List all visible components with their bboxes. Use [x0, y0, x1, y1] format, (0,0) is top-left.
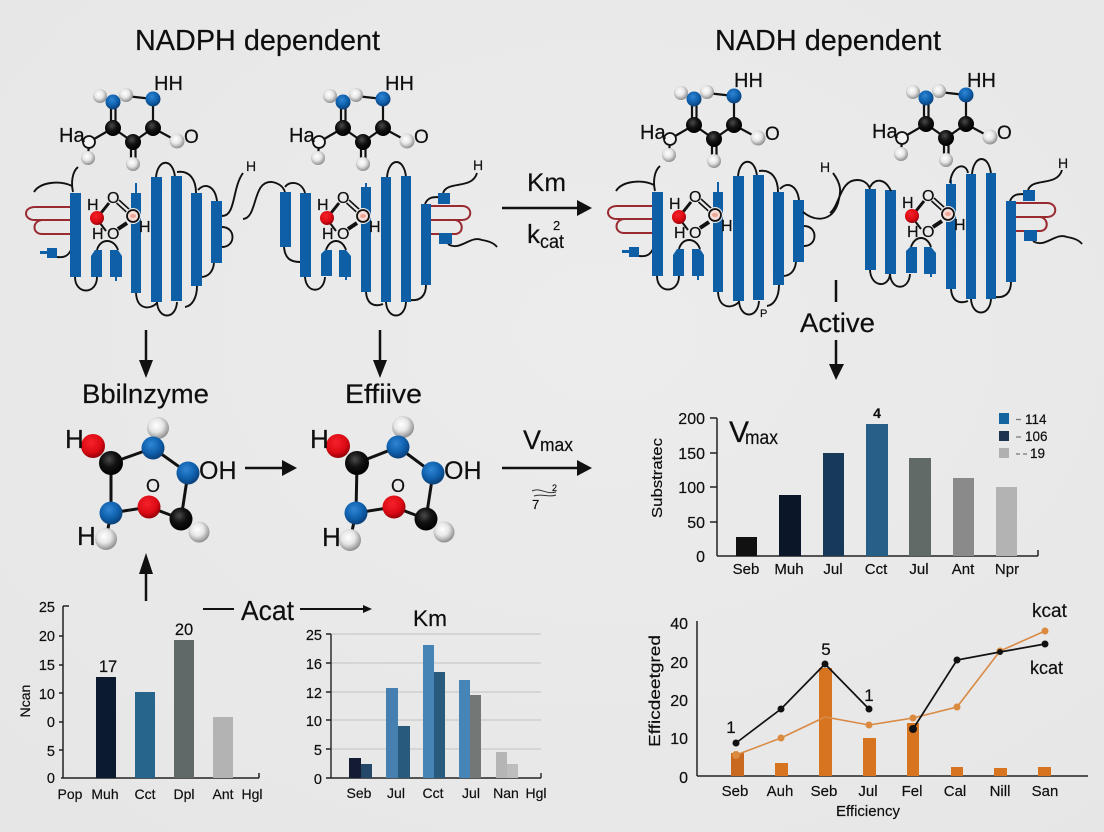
cofactor molecule: Ha — [640, 122, 666, 144]
cofactor molecule — [59, 73, 199, 171]
y tick labels: 10 — [39, 687, 55, 703]
black line — [732, 640, 1048, 746]
active site: H — [902, 195, 914, 212]
y tick labels: 5 — [314, 743, 322, 759]
enzyme structure 1 (NADPH) — [26, 73, 256, 316]
x labels: Muh — [774, 561, 804, 578]
y tick labels — [678, 411, 705, 566]
x labels: Hgl — [241, 786, 263, 802]
y tick labels: 10 — [670, 731, 688, 748]
x labels: Seb — [733, 561, 759, 578]
chart title — [729, 416, 778, 449]
x labels: Jul — [462, 785, 480, 801]
arrow with Vmax label: 2 — [552, 483, 557, 493]
active site: H — [317, 197, 329, 214]
protein ribbon — [830, 159, 1082, 312]
cofactor molecule — [872, 70, 1012, 167]
y tick labels: 0 — [696, 549, 705, 566]
y tick labels: 20 — [670, 693, 688, 710]
arrow with Km and kcat labels: 2 — [553, 218, 560, 233]
cofactor molecule: O — [765, 124, 780, 145]
x labels: Jul — [858, 783, 878, 800]
x labels: Muh — [91, 786, 119, 802]
axes — [697, 621, 1088, 776]
x labels: Seb — [811, 783, 837, 800]
molecule: substrate left: O — [146, 476, 160, 496]
enzyme structure 4 (NADH) — [830, 70, 1082, 312]
y tick labels: 20 — [39, 629, 55, 645]
arrow: down centre — [373, 330, 387, 378]
y tick labels: 10 — [306, 714, 322, 730]
x labels: Nan — [493, 785, 519, 801]
cofactor molecule: HH — [154, 73, 183, 95]
x labels: Jul — [823, 561, 843, 578]
x labels: Ant — [212, 786, 234, 802]
x labels: Auh — [767, 783, 793, 800]
title: NADH dependent: NADH dependent — [715, 25, 941, 57]
cofactor molecule: O — [997, 123, 1012, 144]
active site: O — [107, 190, 119, 207]
active site: H — [907, 224, 919, 241]
x labels: Ant — [952, 561, 975, 578]
active site: H — [721, 218, 733, 235]
bars — [96, 640, 233, 778]
arrow with Vmax label: 7 — [532, 497, 539, 512]
active site: H — [674, 225, 686, 242]
molecule: substrate left: H — [65, 424, 84, 454]
arrow with Km and kcat labels: Km — [527, 169, 566, 197]
molecule: substrate right: H — [322, 522, 341, 552]
active site: H — [669, 196, 681, 213]
orange line — [732, 628, 1048, 759]
active site: H — [954, 217, 966, 234]
legend: 106 — [1025, 429, 1048, 444]
active site: O — [107, 226, 119, 243]
x labels: Npr — [995, 561, 1019, 578]
bars — [349, 645, 518, 778]
y tick labels: 0 — [314, 772, 322, 788]
arrow with Km and kcat labels: k — [527, 219, 541, 249]
y tick labels: 0 — [47, 715, 55, 731]
cofactor molecule: O — [184, 127, 199, 148]
label: Active with arrow — [800, 280, 875, 380]
y tick labels: 40 — [670, 616, 688, 633]
cofactor molecule: Ha — [59, 125, 85, 147]
tail with H — [222, 158, 256, 216]
tail with H: H — [820, 159, 830, 175]
active site: O — [689, 189, 701, 206]
y tick labels: 50 — [687, 515, 705, 532]
x labels: Seb — [347, 785, 372, 801]
y tick labels: 25 — [39, 600, 55, 616]
x labels — [58, 786, 263, 802]
chart title: max — [745, 428, 778, 449]
x labels: Fel — [902, 783, 922, 800]
molecule: substrate left — [65, 417, 236, 551]
value labels: 1 — [864, 686, 874, 705]
grouped bar chart: Km — [306, 606, 547, 801]
x labels: Cct — [422, 785, 444, 801]
x labels — [347, 785, 547, 801]
y tick labels: 20 — [670, 655, 688, 672]
value labels: 5 — [821, 640, 831, 659]
heading: Bbilnzyme: Bbilnzyme — [82, 379, 209, 409]
active site: H — [92, 226, 104, 243]
y axis title: Efficdeetgred — [647, 635, 664, 747]
axes — [59, 606, 259, 778]
legend — [999, 412, 1048, 461]
x labels: Cct — [865, 561, 888, 578]
small P label: P — [760, 308, 767, 320]
active site: O — [337, 190, 349, 207]
arrow: down left — [139, 330, 153, 378]
active site — [902, 188, 966, 241]
cofactor molecule: Ha — [872, 121, 898, 143]
arrow: between molecules — [245, 460, 297, 476]
active site — [669, 189, 733, 242]
series labels: kcat — [1030, 658, 1063, 678]
active site: H — [322, 226, 334, 243]
y tick labels: 12 — [306, 686, 322, 702]
active site: H — [139, 219, 151, 236]
axes — [326, 634, 541, 778]
value labels — [726, 640, 874, 737]
series labels: kcat — [1032, 601, 1068, 622]
x axis title: Efficiency — [836, 803, 900, 820]
y tick labels: 100 — [678, 480, 705, 497]
y axis title: Ncan — [17, 685, 33, 717]
combo chart: efficiency and kcat — [647, 601, 1088, 820]
active site: O — [922, 188, 934, 205]
tail with H — [803, 159, 840, 219]
y tick labels: 200 — [678, 411, 705, 428]
active site: O — [689, 225, 701, 242]
gridlines — [331, 634, 541, 749]
molecule: substrate left: H — [77, 521, 96, 551]
chart title: V — [729, 416, 749, 449]
y tick labels: 0 — [47, 771, 55, 787]
value labels — [99, 621, 193, 676]
protein ribbon — [243, 162, 497, 316]
active site — [87, 190, 151, 243]
cofactor molecule: HH — [734, 70, 763, 92]
title: NADPH dependent: NADPH dependent — [135, 25, 380, 57]
axes — [710, 418, 1038, 556]
molecule: substrate right: OH — [444, 457, 482, 485]
arrow with Vmax label — [502, 425, 592, 512]
value labels: 20 — [175, 621, 193, 639]
arrow with Km and kcat labels — [502, 169, 592, 253]
y tick labels: 0 — [679, 770, 688, 787]
protein ribbon — [608, 162, 814, 314]
y tick labels — [39, 600, 55, 787]
label: Active with arrow: Active — [800, 308, 875, 338]
cofactor molecule — [289, 73, 429, 171]
tail with H: H — [246, 158, 256, 174]
y tick labels: 5 — [47, 744, 55, 760]
cofactor molecule — [640, 70, 780, 168]
y tick labels — [670, 616, 688, 787]
arrow with Vmax label: V — [523, 425, 541, 455]
molecule: substrate right: H — [310, 424, 329, 454]
x labels: Nill — [990, 783, 1010, 800]
arrow with Vmax label: max — [540, 435, 573, 455]
label: Acat with arrows: Acat — [241, 595, 294, 626]
active site — [317, 190, 381, 243]
active site: O — [922, 224, 934, 241]
x labels: Cct — [134, 786, 156, 802]
chart title: Km — [413, 606, 447, 631]
molecule: substrate right — [310, 416, 482, 552]
cofactor molecule: Ha — [289, 125, 315, 147]
y tick labels: 15 — [39, 658, 55, 674]
x labels — [722, 783, 1058, 800]
molecule: substrate left: OH — [199, 457, 236, 485]
legend: 114 — [1025, 412, 1047, 427]
value labels: 17 — [99, 658, 117, 676]
molecule: substrate right: O — [391, 476, 405, 496]
legend: 19 — [1030, 446, 1045, 461]
y tick labels: 25 — [306, 628, 322, 644]
orange bars — [731, 668, 1051, 776]
tail label H: H — [1058, 155, 1068, 171]
active site: H — [369, 219, 381, 236]
y axis title: Substratec — [649, 437, 666, 518]
value label: 4 — [873, 405, 881, 421]
x labels: Hgl — [525, 785, 547, 801]
series labels — [1030, 601, 1068, 678]
y tick labels: 150 — [678, 446, 705, 463]
x labels: Cal — [944, 783, 966, 800]
cofactor molecule: O — [414, 127, 429, 148]
bar chart: bottom left — [17, 600, 263, 802]
x labels — [733, 561, 1019, 578]
active site: H — [87, 197, 99, 214]
x labels: Jul — [387, 785, 405, 801]
x labels: Seb — [722, 783, 748, 800]
x labels: Pop — [58, 786, 83, 802]
enzyme structure 3 (NADH) — [608, 70, 840, 320]
heading: Effiive: Effiive — [345, 379, 422, 409]
cofactor molecule: HH — [967, 70, 996, 92]
y tick labels — [306, 628, 322, 788]
label: Acat with arrows — [203, 595, 372, 626]
arrow with Km and kcat labels: cat — [540, 232, 565, 253]
tail label H: H — [473, 157, 483, 173]
bars — [736, 424, 1017, 556]
arrow: up to molecule — [139, 553, 153, 601]
protein ribbon — [26, 163, 232, 316]
active site: O — [337, 226, 349, 243]
value labels: 1 — [726, 718, 736, 737]
x labels: San — [1032, 783, 1058, 800]
bar chart: Vmax — [649, 405, 1048, 578]
enzyme structure 2 (NADPH) — [243, 73, 497, 316]
y tick labels: 16 — [306, 657, 322, 673]
cofactor molecule: HH — [385, 73, 414, 95]
x labels: Jul — [909, 561, 929, 578]
x labels: Dpl — [173, 786, 195, 802]
